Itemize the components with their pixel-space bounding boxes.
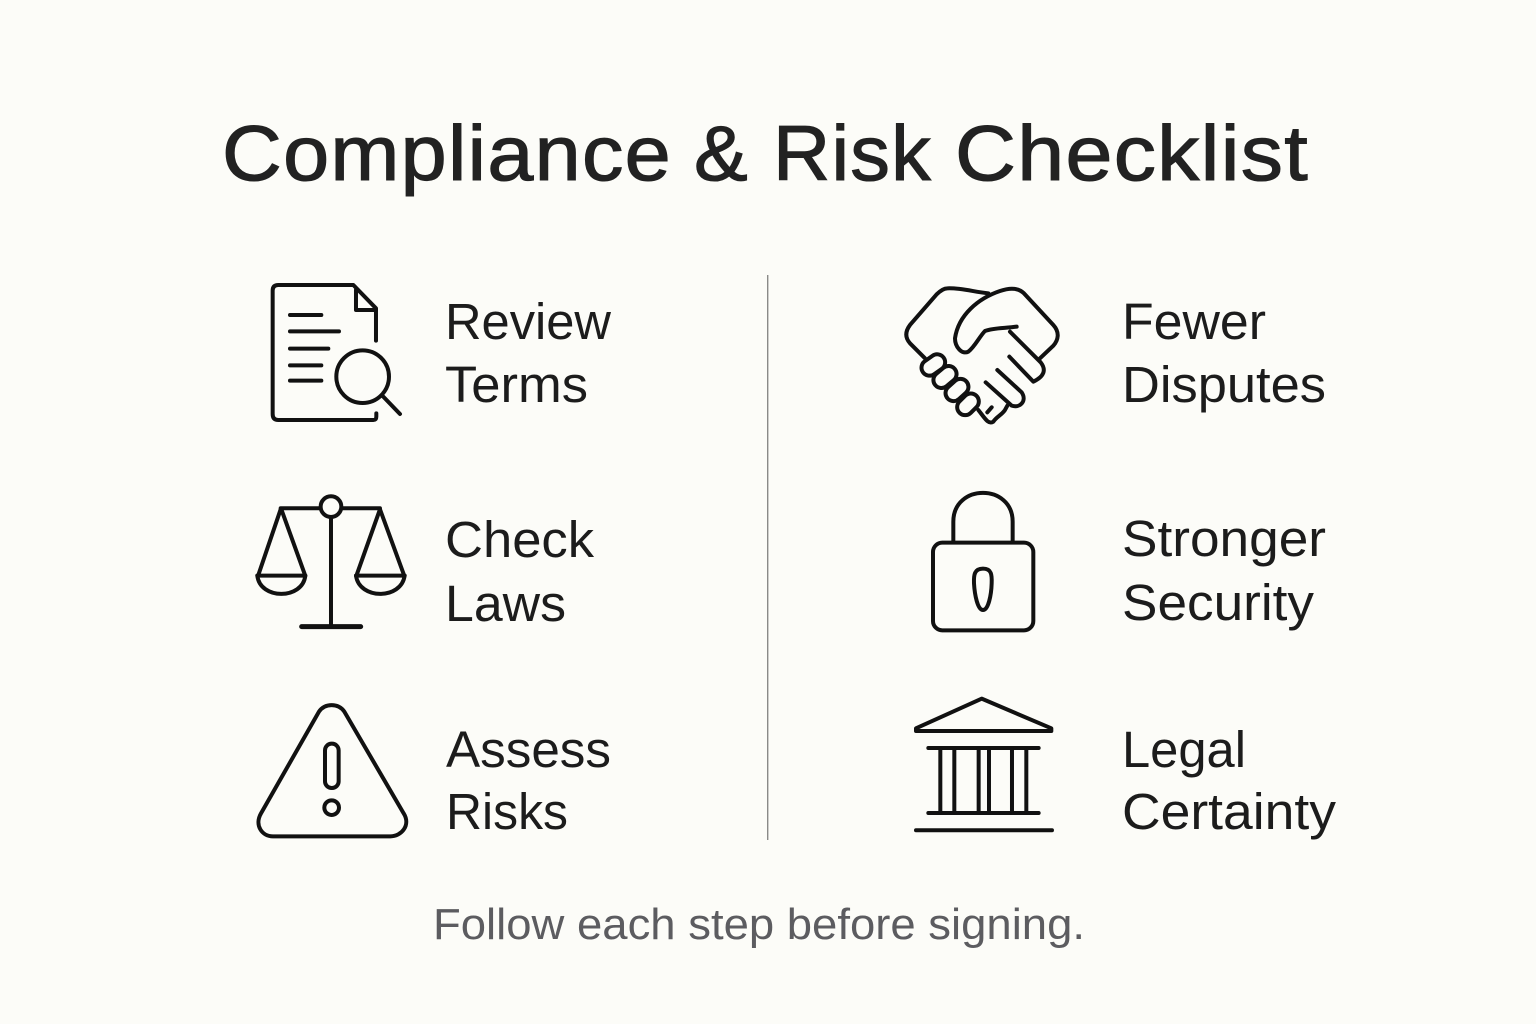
label: review terms: Review [445,293,611,350]
footer note: Follow each step before signing. [433,900,1085,949]
label: assess risks: Risks [446,783,568,840]
label: legal certainty: Certainty [1122,783,1337,840]
icon: document with magnifier [273,285,400,420]
label: assess risks: Assess [446,721,611,778]
icon: scales [257,496,405,627]
label: stronger security: Stronger [1122,510,1326,567]
label: fewer disputes: Disputes [1122,356,1326,413]
title: & [694,109,749,197]
label: review terms [445,293,611,413]
icon: padlock [933,493,1033,630]
center divider [767,275,768,840]
label: check laws: Laws [445,575,566,632]
label: legal certainty [1122,721,1337,840]
icon: warning triangle [258,705,406,836]
label: stronger security [1122,510,1326,631]
title: Compliance [222,109,672,197]
label: check laws: Check [445,511,595,568]
title: Checklist [955,109,1309,197]
label: legal certainty: Legal [1122,721,1246,778]
title: Risk [773,109,932,197]
title [222,109,1309,197]
icon: courthouse [916,699,1052,830]
label: fewer disputes [1122,293,1326,413]
label: review terms: Terms [445,356,588,413]
label: stronger security: Security [1122,574,1315,631]
icon: handshake [906,288,1058,423]
label: fewer disputes: Fewer [1122,293,1266,350]
label: check laws [445,511,595,632]
label: assess risks [446,721,611,840]
